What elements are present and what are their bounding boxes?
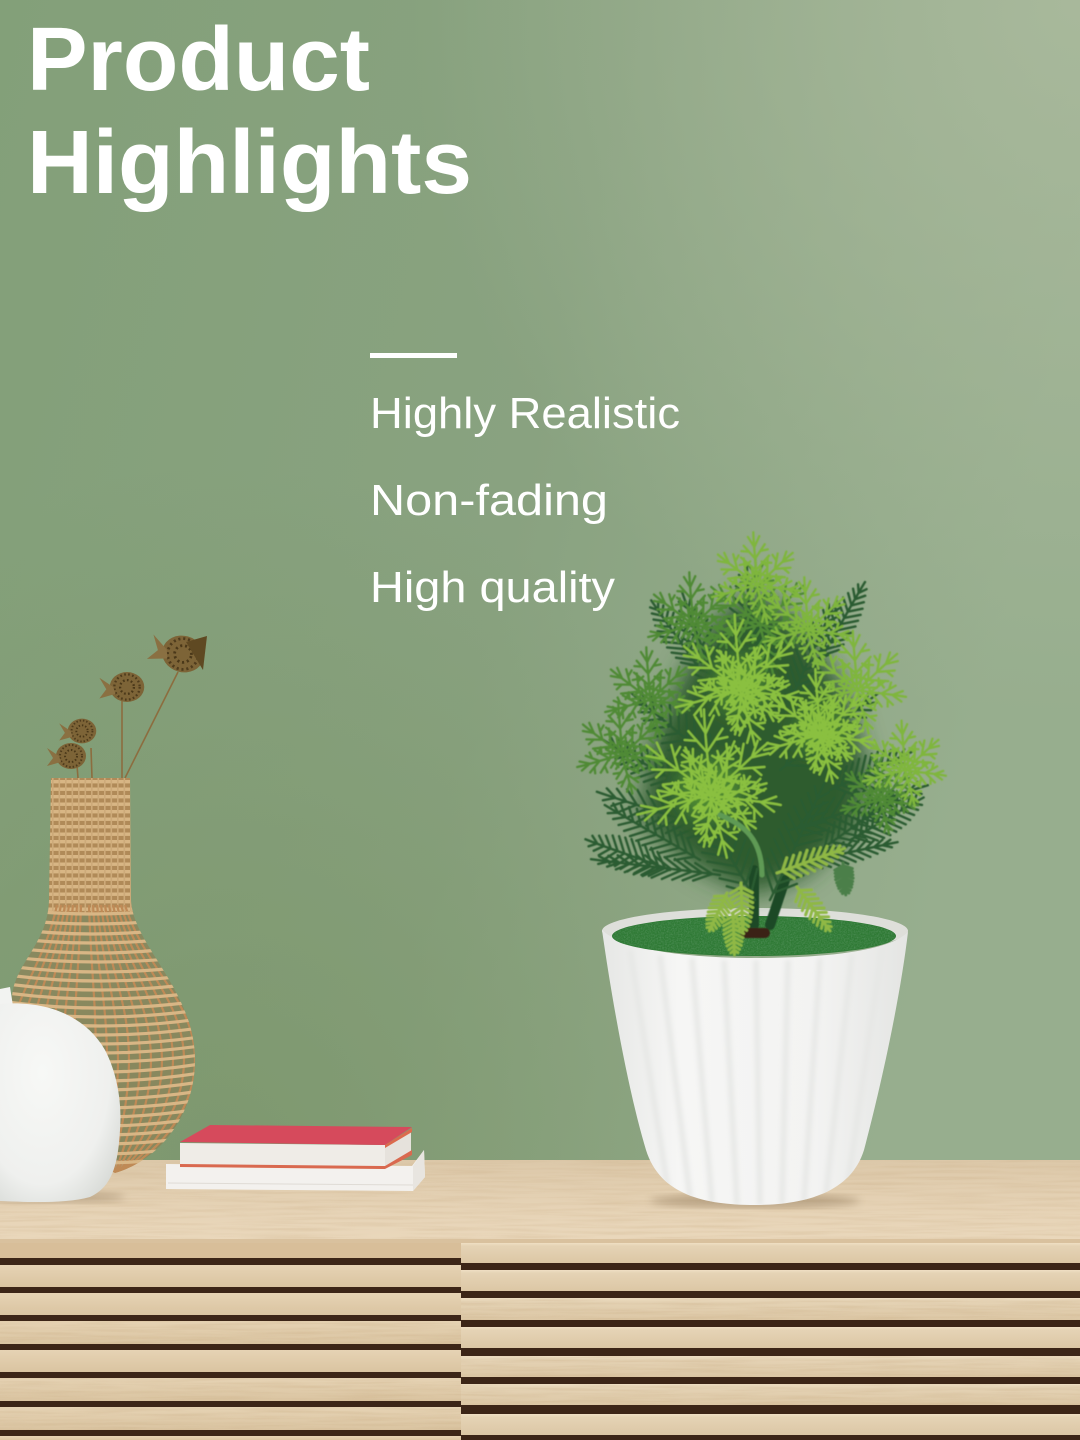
center cluster (671, 613, 805, 750)
potted artificial plant (574, 531, 948, 1208)
bright-cluster underglow (678, 657, 844, 820)
accent divider (370, 353, 457, 358)
highlights list: Non-fading (370, 476, 608, 525)
title: Product (27, 10, 370, 110)
upper book (180, 1125, 412, 1169)
top tip cluster (709, 531, 802, 627)
far right cluster (860, 720, 948, 809)
lower book (166, 1150, 425, 1191)
dried flowers (47, 628, 208, 769)
woven body (0, 778, 200, 1175)
mid-green clusters (574, 558, 920, 837)
right cluster (803, 630, 908, 737)
table top (0, 1160, 1080, 1243)
bright-green clusters (709, 531, 948, 809)
highlights list: Highly Realistic (370, 389, 680, 438)
lower center cluster (632, 708, 784, 863)
stacked books (166, 1125, 425, 1191)
curved pale stem (720, 815, 762, 875)
title: Highlights (27, 113, 472, 213)
dark fronds (580, 564, 933, 911)
woven vase with dried flowers (0, 628, 208, 1175)
slatted front, dark recess (0, 1243, 1080, 1440)
right cabinet slats (461, 1243, 1080, 1435)
title (27, 10, 472, 213)
hanging dark frond (834, 862, 855, 896)
upper right cluster (760, 576, 853, 672)
dried flower stems (77, 672, 178, 778)
left cabinet slats (0, 1243, 461, 1440)
highlights list (370, 389, 680, 612)
white fluted pot (602, 908, 908, 1205)
center-right cluster (760, 668, 877, 787)
artificial grass (610, 915, 900, 957)
trunk (745, 870, 785, 933)
pot shadow (650, 1194, 860, 1208)
dark foliage mass (640, 590, 868, 895)
white ceramic vase (0, 987, 125, 1203)
wooden sideboard (0, 1160, 1080, 1440)
low feathery fronds (700, 838, 848, 955)
foliage (574, 531, 948, 955)
highlights list: High quality (370, 563, 615, 612)
wood grain overlay on slats (0, 1298, 1080, 1430)
